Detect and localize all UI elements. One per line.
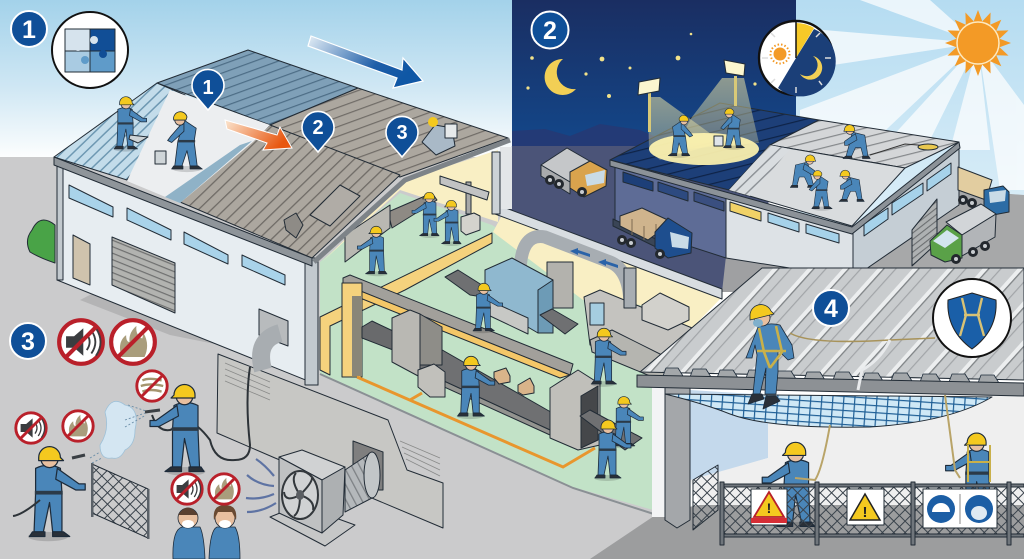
blue flatbed truck xyxy=(613,208,692,259)
no flame lower xyxy=(209,474,239,504)
day sky panel xyxy=(796,0,1024,280)
floodlight B xyxy=(724,60,745,106)
white wall left xyxy=(652,385,666,517)
icon: puzzle xyxy=(52,12,128,88)
upper machine xyxy=(440,176,489,235)
roof workers xyxy=(113,97,457,172)
column xyxy=(665,385,690,528)
gable eave xyxy=(314,140,510,262)
hook strap xyxy=(858,340,890,390)
wall post xyxy=(492,152,500,214)
sun rays xyxy=(800,0,1024,190)
barrier louvres left xyxy=(225,363,270,400)
distant mountains xyxy=(512,124,680,147)
day workers xyxy=(790,125,938,211)
orange flow arrow xyxy=(225,120,292,150)
floodlight A xyxy=(638,78,660,132)
roll shutter xyxy=(912,199,937,266)
front roof grey xyxy=(180,125,400,258)
right ground xyxy=(840,190,1024,290)
noise barrier wall xyxy=(217,354,443,528)
no noise left xyxy=(16,413,46,443)
spray cloud xyxy=(100,401,136,458)
numbered badge 1: 1 xyxy=(22,16,36,44)
night roof xyxy=(610,103,819,190)
back roof blue panels xyxy=(157,50,358,125)
blue flow arrow xyxy=(308,36,423,88)
day wall xyxy=(726,197,853,278)
boxes xyxy=(494,368,534,395)
chain-link fence xyxy=(693,465,1024,545)
worker with rope xyxy=(945,395,996,515)
night sky panel xyxy=(512,0,796,147)
night wall xyxy=(615,165,726,258)
eave corrugation tabs xyxy=(663,368,999,383)
AC unit xyxy=(279,450,345,533)
map pin 3: 3 xyxy=(396,122,408,144)
ground left xyxy=(0,157,660,559)
numbered badge 2 xyxy=(532,12,568,48)
lifeline xyxy=(790,333,935,341)
no dust xyxy=(137,371,167,401)
main conveyor xyxy=(418,343,556,435)
cabinet xyxy=(392,310,442,377)
roof equipment xyxy=(284,185,360,238)
shutter xyxy=(112,237,175,313)
fan base xyxy=(270,505,355,546)
floodlight beam B xyxy=(674,78,759,150)
blue interior xyxy=(690,390,768,480)
bush xyxy=(27,220,55,263)
left mesh fence xyxy=(91,463,150,539)
night half xyxy=(778,29,836,96)
duct flow arrows xyxy=(570,248,618,268)
green truck xyxy=(930,204,996,264)
wall corner posts xyxy=(57,163,318,385)
left building xyxy=(27,50,510,385)
yellow beam underside xyxy=(343,284,570,378)
pale blue ribbed section xyxy=(54,83,185,180)
night ground xyxy=(495,146,780,292)
eave xyxy=(610,142,960,234)
back light roof xyxy=(770,120,959,168)
right conveyor xyxy=(580,410,642,450)
numbered badge 1 xyxy=(11,11,47,47)
map pin 2 xyxy=(302,111,334,152)
moon xyxy=(545,59,576,95)
main beam xyxy=(343,275,573,375)
yellow dividing wall xyxy=(320,233,492,375)
no noise lower xyxy=(172,474,202,504)
numbered badge 2: 2 xyxy=(543,17,557,45)
warning sign xyxy=(847,489,884,525)
clock moon xyxy=(800,56,822,80)
rear wall cream xyxy=(493,215,722,330)
numbered badge 4 xyxy=(813,290,849,326)
sky left xyxy=(0,0,512,158)
clock xyxy=(759,21,836,96)
night workers xyxy=(668,108,744,158)
numbered badge 4: 4 xyxy=(824,295,838,323)
interior workers xyxy=(357,192,643,481)
back conveyor xyxy=(445,270,485,297)
post shade xyxy=(352,296,362,376)
front eave xyxy=(54,157,312,266)
map pin 2: 2 xyxy=(312,117,324,139)
big roof xyxy=(640,268,1024,380)
safety section: wall under roof xyxy=(590,385,1024,559)
blue machine xyxy=(485,258,573,334)
left conveyor xyxy=(362,321,393,350)
back roof grey xyxy=(270,88,508,177)
map pin 1: 1 xyxy=(202,77,214,99)
x-ray machine xyxy=(550,370,600,450)
harness worker xyxy=(746,305,794,409)
gantry post xyxy=(342,283,362,377)
orange truck xyxy=(541,148,607,197)
dark ground xyxy=(590,500,1024,559)
right machine xyxy=(584,268,697,378)
wall outlet plate xyxy=(259,309,288,346)
front coated roof xyxy=(729,145,905,226)
no noise large xyxy=(59,320,103,364)
spray dots xyxy=(90,405,148,463)
windows xyxy=(69,185,285,285)
end wall strip xyxy=(500,147,512,209)
air arrows xyxy=(246,459,276,512)
no flame large xyxy=(111,320,155,364)
icon: harness shield xyxy=(933,279,1011,357)
no flame left xyxy=(63,411,93,441)
day ground patch xyxy=(722,256,860,292)
white coating xyxy=(127,90,270,203)
clock sun xyxy=(770,44,790,64)
blue band xyxy=(165,141,252,203)
orange floor line xyxy=(357,377,595,467)
door xyxy=(73,235,90,285)
rear blue truck xyxy=(958,167,1009,215)
upper back wall xyxy=(322,150,498,262)
light pool xyxy=(649,133,759,165)
eave bar xyxy=(637,375,1024,396)
map pin 3 xyxy=(386,116,418,157)
office staff xyxy=(173,505,240,559)
right building xyxy=(610,60,960,278)
clock ticks xyxy=(762,33,831,93)
worker with lanyard xyxy=(762,425,830,531)
hose xyxy=(152,367,250,460)
duct arch xyxy=(520,236,630,307)
prohibition signs xyxy=(16,320,239,504)
duct mount xyxy=(353,441,383,490)
upper conveyor xyxy=(388,193,437,228)
ribbed strip xyxy=(729,145,790,196)
interior cutaway xyxy=(320,147,722,516)
floor edge xyxy=(320,374,660,516)
back conveyor right xyxy=(540,309,578,334)
windows xyxy=(623,163,951,243)
front wall xyxy=(57,163,318,385)
fan xyxy=(282,471,318,519)
numbered badge 3: 3 xyxy=(21,328,35,356)
wall duct xyxy=(261,333,280,370)
safety net xyxy=(665,394,992,427)
floodlight beam A xyxy=(648,97,722,160)
warning sign red: ! xyxy=(767,500,771,516)
partition wall band xyxy=(495,204,722,299)
white back wall xyxy=(690,395,1024,505)
stars and moon xyxy=(526,33,757,98)
map pin 1 xyxy=(192,69,224,110)
dusk wedge xyxy=(796,23,814,58)
ground shadow xyxy=(80,283,305,362)
sun xyxy=(945,10,1011,76)
interior floor xyxy=(320,193,660,512)
numbered badge 3 xyxy=(10,323,46,359)
right side wall xyxy=(853,146,959,278)
mandatory PPE sign xyxy=(923,489,997,528)
spraying workers xyxy=(13,384,206,541)
warning sign red xyxy=(751,489,787,525)
barrier louvres right xyxy=(400,441,440,476)
warning sign: ! xyxy=(862,504,868,521)
operator console xyxy=(418,364,445,397)
ribbed duct xyxy=(345,452,380,512)
wall box upper xyxy=(345,205,390,262)
